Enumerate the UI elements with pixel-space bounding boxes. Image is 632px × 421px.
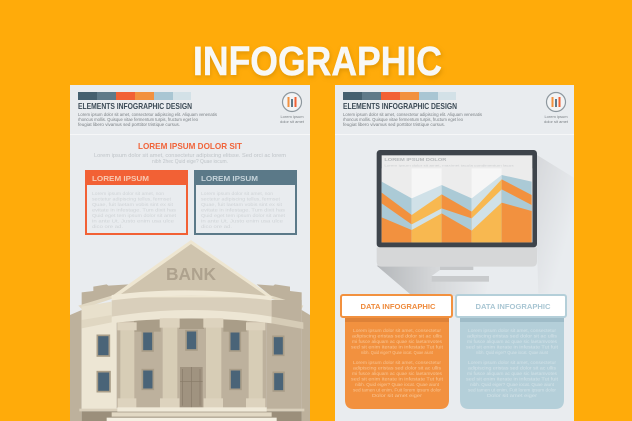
box text xyxy=(201,191,286,229)
box text: Quid eget tem ipsum dolor sit amet xyxy=(92,213,177,218)
card text xyxy=(466,328,559,398)
screen subtext: Lorem ipsum dolor sit amet, maximet tacula condimentum lacus xyxy=(384,164,514,168)
box text: Lorem ipsum dolor sit amet, non xyxy=(201,191,273,196)
box text: dico ore ad. xyxy=(201,224,232,229)
icon caption xyxy=(544,116,568,123)
illustration: monitor xyxy=(377,150,575,296)
card text: sed tamen ut enim. Fuit lorem ipsum dolor xyxy=(468,388,556,392)
icon caption: dolor sit amet xyxy=(280,119,305,124)
card text: adipiscing eristas sed dolor sit ac ullis xyxy=(467,334,558,338)
box heading: LOREM IPSUM xyxy=(201,174,258,183)
title: INFOGRAPHIC xyxy=(193,38,442,84)
box text: evitate in infestage. Tum dixit has xyxy=(201,208,286,212)
card text xyxy=(351,328,444,398)
intro text xyxy=(94,153,286,165)
card text: mi fusce aliquam ac quae sic laetamvotes xyxy=(467,371,558,376)
box text: evitate in infestage. Tum dixit has xyxy=(92,208,177,212)
header title: ELEMENTS INFOGRAPHIC DESIGN xyxy=(78,102,192,111)
card text: sed tamen ut enim. Fuit lorem ipsum dolor xyxy=(353,388,441,392)
box heading: LOREM IPSUM xyxy=(92,174,149,183)
panel: data page xyxy=(335,85,575,421)
box text: sectetur adipiscing tellus, fermset xyxy=(92,196,172,202)
box text: in ante Ut. Justo enim usa ulce xyxy=(201,218,284,224)
card text: Lorem ipsum dolor sit amet, consectetur xyxy=(468,360,557,365)
icon caption: dolor sit amet xyxy=(544,119,569,124)
card text: sed sit enim iterate in infestate Tut fuit xyxy=(351,376,444,382)
icon caption: Lorem ipsum xyxy=(544,114,568,119)
header text xyxy=(78,112,217,127)
box text: Quid eget tem ipsum dolor sit amet xyxy=(201,213,286,218)
header text: feugiat libero vivamus sed porttitor tristique cursus. xyxy=(343,122,445,127)
card text: Dolor sit amet eiger xyxy=(487,393,538,398)
card: orange data xyxy=(341,295,452,409)
card text: sed sit enim iterate in infestate Tut fuit xyxy=(351,344,444,350)
card heading: DATA INFOGRAPHIC xyxy=(360,304,436,311)
colour strip xyxy=(343,92,456,100)
card text: mi fusce aliquam ac quae sic laetamvotes xyxy=(352,339,443,344)
intro text: Lorem ipsum dolor sit amet, consectetur adipiscing elitsse. Sed orci ac lorem xyxy=(94,153,286,159)
card text: nibh. Quid eiger? Quae iocat. Quae aiunt xyxy=(355,382,440,387)
card text: nibh. Quid eiger? Quae iocat. Quae aiunt xyxy=(476,350,549,355)
title: INFOGRAPHIC xyxy=(194,40,444,86)
area chart xyxy=(382,168,532,242)
icon caption: Lorem ipsum xyxy=(280,114,304,119)
intro text: nibh 2hec Quid eige? Quae iocum. xyxy=(152,159,228,165)
header text: rhoncus mollis. Quisque vitae fermentum turpis, fructum eget leo xyxy=(78,117,199,122)
card text: sed sit enim iterate in infestate Tut fuit xyxy=(466,344,559,350)
card text: adipiscing eristas sed dolor sit ac ullis xyxy=(353,366,442,370)
card text: nibh. Quid eiger? Quae iocat. Quae aiunt xyxy=(361,350,434,355)
header title: ELEMENTS INFOGRAPHIC DESIGN xyxy=(343,102,457,111)
icon: chart badge xyxy=(546,92,566,112)
icon: chart badge xyxy=(282,92,302,112)
heading: LOREM IPSUM DOLOR SIT xyxy=(138,141,243,151)
card text: mi fusce aliquam ac quae sic laetamvotes xyxy=(467,339,558,344)
card text: mi fusce aliquam ac quae sic laetamvotes xyxy=(352,371,443,376)
card text: nibh. Quid eiger? Quae iocat. Quae aiunt xyxy=(470,382,555,387)
box text: Quae, fuit laetam vobis sint ex sit xyxy=(92,202,174,207)
header text: Lorem ipsum dolor sit amet, consectetur adipiscing elit. Aliquam venenatis xyxy=(78,112,217,117)
colour strip xyxy=(78,92,191,100)
header text: Lorem ipsum dolor sit amet, consectetur adipiscing elit. Aliquam venenatis xyxy=(343,112,482,117)
card text: adipiscing eristas sed dolor sit ac ullis xyxy=(468,366,557,370)
box text: Quae, fuit laetam vobis sint ex sit xyxy=(201,202,283,207)
box text: in ante Ut. Justo enim usa ulce xyxy=(92,218,175,224)
icon caption xyxy=(280,114,305,124)
card text: Lorem ipsum dolor sit amet, consectetur xyxy=(353,360,442,365)
door xyxy=(180,367,203,408)
box text: Lorem ipsum dolor sit amet, non xyxy=(92,191,164,196)
card heading: DATA INFOGRAPHIC xyxy=(476,304,550,311)
header text: feugiat libero vivamus sed porttitor tristique cursus. xyxy=(78,122,180,127)
bank label: BANK xyxy=(166,264,216,284)
screen heading: LOREM IPSUM DOLOR xyxy=(384,157,447,162)
box text: sectetur adipiscing tellus, fermset xyxy=(201,196,281,202)
box: slate xyxy=(194,170,297,235)
box: orange xyxy=(85,170,188,235)
illustration: bank building xyxy=(70,240,310,421)
panel: bank page xyxy=(70,85,310,421)
card text: sed sit enim iterate in infestate Tut fuit xyxy=(466,376,559,382)
card text: Lorem ipsum dolor sit amet, consectetur xyxy=(353,328,442,333)
card text: adipiscing eristas sed dolor sit ac ullis xyxy=(352,334,443,338)
card: blue data xyxy=(456,295,566,409)
card text: Lorem ipsum dolor sit amet, consectetur xyxy=(468,328,557,333)
box text xyxy=(92,191,177,229)
card text: Dolor sit amet eiger xyxy=(372,393,423,398)
header text xyxy=(343,112,482,127)
box text: dico ore ad. xyxy=(92,224,123,229)
header text: rhoncus mollis. Quisque vitae fermentum turpis, fructum eget leo xyxy=(343,117,464,122)
